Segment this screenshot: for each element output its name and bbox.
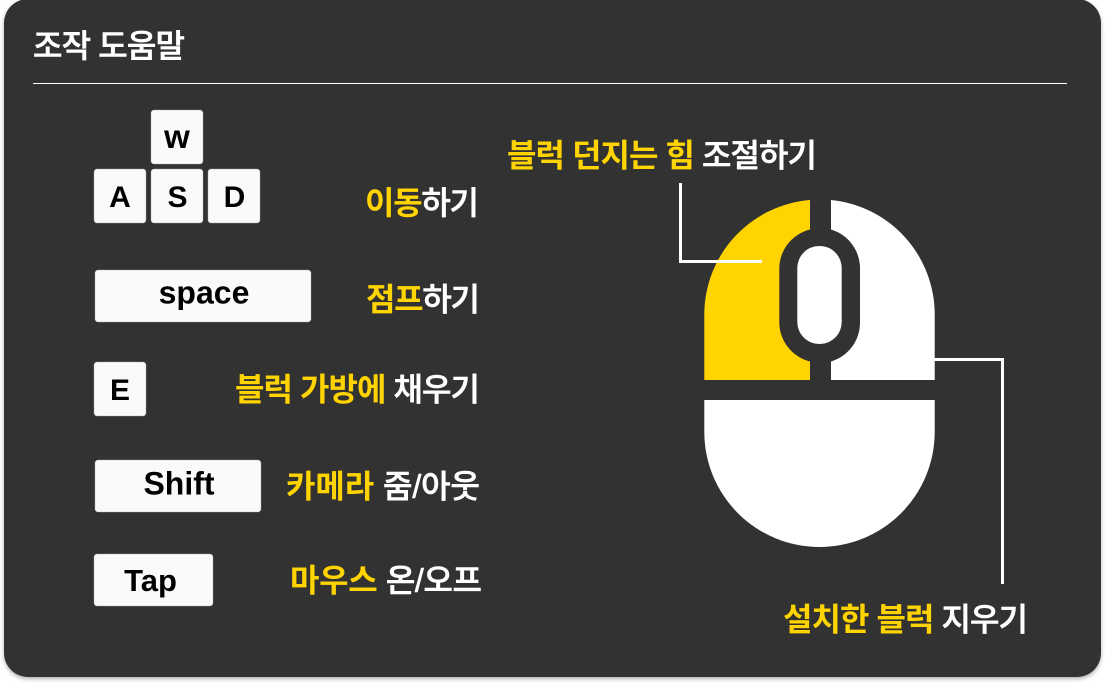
label: camera zoom: 카메라 줌/아웃 xyxy=(286,468,480,504)
label: remove block: 설치한 블럭 지우기 xyxy=(783,602,1028,638)
keys: WASD: w xyxy=(163,118,190,155)
label: jump: 점프하기 xyxy=(366,282,480,318)
key: Shift: Shift xyxy=(143,466,215,502)
label: fill inventory: 블럭 가방에 채우기 xyxy=(235,372,480,408)
label: mouse toggle: 마우스 온/오프 xyxy=(290,562,482,598)
mouse right button xyxy=(831,200,935,380)
mouse body xyxy=(704,400,935,547)
label: throw power: 블럭 던지는 힘 조절하기 xyxy=(507,138,817,174)
key: E xyxy=(94,362,146,416)
keys: WASD: A xyxy=(109,181,131,214)
key: Tap xyxy=(94,554,213,606)
arrow: throw power callout xyxy=(680,183,762,262)
label: move: 이동하기 xyxy=(365,185,479,221)
key: Tap: Tap xyxy=(124,563,177,598)
keys: WASD: D xyxy=(224,181,245,214)
key: space xyxy=(95,270,311,322)
keys: WASD: S xyxy=(167,181,188,214)
key: E: E xyxy=(110,374,130,407)
arrow: remove block callout xyxy=(934,360,1002,584)
keys: WASD xyxy=(94,110,260,223)
icon: mouse xyxy=(704,200,935,547)
mouse left button xyxy=(704,200,810,380)
mouse wheel xyxy=(797,246,842,344)
title: 조작 도움말 xyxy=(33,28,185,64)
key: space: space xyxy=(159,274,249,310)
key: Shift xyxy=(95,460,261,512)
